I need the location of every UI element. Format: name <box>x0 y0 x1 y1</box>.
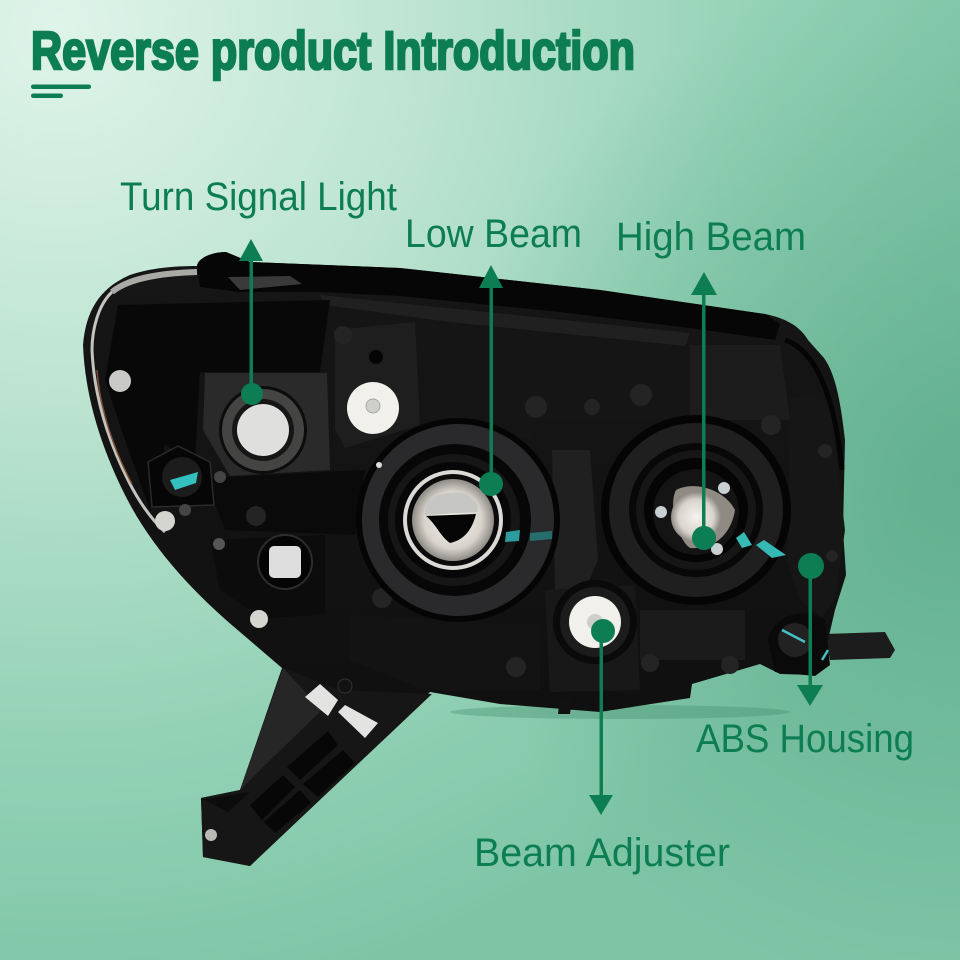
boss details <box>246 326 838 677</box>
title underline accent <box>31 84 91 98</box>
clip highlight <box>228 276 302 290</box>
left dark recess <box>105 300 330 510</box>
upper inner moulding <box>320 295 690 346</box>
lower centre box <box>350 615 540 692</box>
callout: ABS Housing: ABS Housing <box>696 717 914 761</box>
white disc plate <box>335 322 420 448</box>
clear lens edge <box>92 292 165 532</box>
beam adjuster <box>553 580 637 664</box>
screws <box>109 370 268 628</box>
housing body <box>83 252 846 866</box>
mid-left panel <box>205 470 365 535</box>
callout: Low Beam: Low Beam <box>405 212 582 256</box>
lower left panel <box>210 535 325 618</box>
callout: High Beam <box>616 215 806 550</box>
right edge rim <box>785 340 842 470</box>
callout: Beam Adjuster <box>474 619 730 875</box>
clear lens top strip <box>112 272 197 292</box>
headlight photo <box>83 252 895 866</box>
turn signal plate <box>203 373 330 476</box>
amber reflector line <box>97 370 132 484</box>
center divider <box>552 450 598 590</box>
small socket left <box>148 446 226 507</box>
white disc with bolt <box>347 350 399 434</box>
right side housing <box>787 396 845 618</box>
turn signal bulb socket <box>219 386 307 474</box>
product shadow <box>450 705 790 719</box>
mounting bracket right <box>825 632 895 660</box>
callout: Beam Adjuster: Beam Adjuster <box>474 831 730 875</box>
right upper panel <box>690 345 790 420</box>
ABS housing socket <box>768 614 830 676</box>
callout: Turn Signal Light: Turn Signal Light <box>120 175 397 219</box>
callout: Turn Signal Light <box>120 175 397 405</box>
callout: High Beam: High Beam <box>616 215 806 259</box>
lower label panel <box>640 610 745 660</box>
adjuster panel <box>545 585 640 692</box>
callout: ABS Housing <box>696 553 914 761</box>
central rear panel <box>425 322 690 440</box>
low beam assembly <box>356 418 560 622</box>
title: Reverse product Introduction <box>31 21 635 81</box>
high beam assembly <box>601 415 791 605</box>
small bulb socket lower <box>213 535 312 589</box>
lower mounting arm <box>200 668 572 866</box>
callout: Low Beam <box>405 212 582 496</box>
top rim band <box>197 252 780 340</box>
